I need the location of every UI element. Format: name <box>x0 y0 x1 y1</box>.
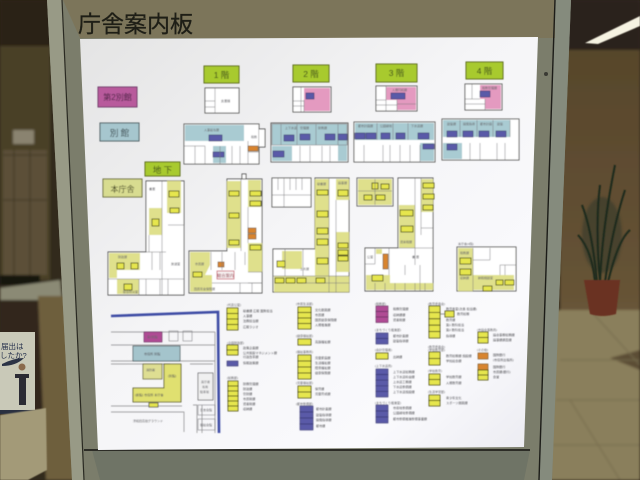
floor plan: 別館 4階: 建築課 <box>447 121 456 126</box>
floor plan: 本庁舎 3階: 公室 <box>367 254 373 259</box>
legend: column 3: 出納課 <box>393 354 402 359</box>
legend: column 2: 都市計画課 <box>316 406 331 411</box>
legend: column 4: 人権教育課 <box>446 380 461 385</box>
legend: column 3 <box>375 301 427 423</box>
floor plan: 別館 3階: 都市計画課 <box>358 123 373 128</box>
map: 駐車場棟: 専用 <box>202 384 208 389</box>
legend: column 3: (税務部) <box>375 301 386 306</box>
legend: column 4: (生涯学習部) <box>428 389 445 394</box>
legend: column 3: 資産税課 <box>393 317 405 322</box>
legend: column 5: 市民課(銀行) <box>493 369 511 374</box>
directory content <box>98 62 519 433</box>
legend: column 2: (児童福祉部) <box>296 380 313 385</box>
legend: column 2: (都市整備部) <box>296 401 313 406</box>
legend: column 2: 高齢福祉課 <box>315 339 330 344</box>
legend: column 3: 上下水道施設課 <box>393 389 415 394</box>
floor plan: 第2別館 4階: 税務管理課 <box>482 85 497 90</box>
potted plant <box>578 165 630 316</box>
legend: column 3: 建築指導課 <box>393 338 408 343</box>
legend: column 2: 建築指導課 <box>316 412 331 417</box>
legend: column 2 <box>296 301 337 430</box>
floor plan: 別館 4階: 開発指導 <box>463 121 475 126</box>
floor plan: 本庁舎 1階: 総合案内 <box>217 272 234 279</box>
map: 別館: 市役所 別館 <box>144 351 160 356</box>
legend: column 4: 教育総務 <box>457 311 469 316</box>
floor plan: 本庁舎 3階 <box>365 178 434 291</box>
floor plan: 別館 3階: 下水道課 <box>411 123 423 128</box>
floor plan: 本庁舎 地下: 財政課 <box>118 254 127 259</box>
legend: column 4: (学校教育) <box>428 368 442 373</box>
panel: lit directory board <box>80 37 538 450</box>
map: neighbouring buildings: 福祉会館 <box>200 422 212 427</box>
floor label: 3階: 3 階 <box>389 68 405 78</box>
legend: column 2: 障害福祉課 <box>315 365 330 370</box>
legend: column 4: 学校教育課 <box>446 374 461 379</box>
legend: column 1: 公共施設マネジメント課 <box>243 350 277 355</box>
tablecloth <box>0 408 47 480</box>
legend: column 5: (市議会事務局) <box>477 327 497 332</box>
map: neighbouring buildings: 日吉会館 <box>200 407 212 412</box>
floor plan: 本庁舎 地下: 書庫 <box>149 186 155 191</box>
legend: column 2: 国民健康保険課 <box>315 317 337 322</box>
floor plan: 本庁舎 1階: 市民課 <box>195 261 204 266</box>
floor plan: 別館 1階: 税務 <box>251 134 257 139</box>
legend: column 1: 収納課 <box>243 406 252 411</box>
floor plan: 別館 2階 <box>271 123 348 162</box>
ceiling light <box>585 16 640 44</box>
entrance marker <box>242 174 246 179</box>
legend: column 3: 収納課課 <box>393 312 405 317</box>
legend: column 2: (健康福祉部) <box>296 333 313 338</box>
building label: 別館 <box>100 123 139 141</box>
legend: column 5: 食堂 <box>493 374 499 379</box>
legend: column 1 <box>227 302 277 411</box>
legend: column 1: 管財課 <box>243 391 252 396</box>
floor plan: 別館 1階: 人事給与課 <box>204 127 219 132</box>
legend: column 2: 開発指導課 <box>316 417 331 422</box>
legend: column 4: 指導課 <box>446 333 455 338</box>
poster on cabinet: したか? <box>0 351 27 360</box>
legend: column 4: 学校給食課 <box>446 358 461 363</box>
legend: column 4: 青少年文化 <box>446 395 461 400</box>
building label: 第2別館: 第2別館 <box>103 92 132 102</box>
legend: column 2: 保育課 <box>315 386 324 391</box>
legend: column 4 <box>428 301 477 406</box>
building label: 第2別館 <box>98 87 137 107</box>
legend: column 4: 第2 教科担当 <box>446 327 464 332</box>
floor plan: 本庁舎 4階: 納税相談室 <box>478 275 493 280</box>
legend: column 4: 教育総務課 施設課 <box>446 353 472 358</box>
floor plan: 本庁舎 3階: 資産税課 <box>400 239 412 244</box>
map: blue boundary line <box>111 312 219 433</box>
floor plan: 本庁舎 4階: 本庁舎(4階) <box>458 241 474 246</box>
legend: column 1: 財政課 <box>243 386 252 391</box>
legend: column 1: 資産税課 <box>243 401 255 406</box>
floor plan: 別館 2階: 財務課 <box>318 125 327 130</box>
legend: column 1: 法務担当課 <box>243 318 258 323</box>
legend: column 2: 都市課 <box>316 423 325 428</box>
legend: column 3: (まちづくり推進部) <box>375 327 401 332</box>
legend: column 3: 下水道整備課 <box>393 384 412 389</box>
map: 消防署: 消防署 <box>146 367 155 372</box>
floor plan: 第2別館 3階 <box>376 86 417 111</box>
legend: column 3: (会計管理者) <box>375 347 392 352</box>
building label: 別館: 別 館 <box>110 128 130 138</box>
legend: column 2: 市民課 <box>315 312 324 317</box>
floor plan: 別館 4階: 都市計画 <box>480 121 492 126</box>
legend: column 1: 人事課 <box>243 313 252 318</box>
floor plan: 本庁舎 4階 <box>457 241 516 291</box>
floor plan: 第2別館 3階: 人権同和課 <box>392 87 407 92</box>
building label: 本庁舎: 本庁舎 <box>110 184 134 194</box>
floor label: 4階 <box>466 62 503 79</box>
floor plan: 別館 4階: 建築 <box>497 121 503 126</box>
floor plan: 本庁舎 3階 上部 <box>357 178 393 206</box>
map: 本庁舎: (別館) <box>168 373 176 378</box>
legend: column 1: 市民税課 <box>243 396 255 401</box>
building label: 本庁舎 <box>103 179 142 197</box>
floor plan: 第2別館 2階 <box>293 87 331 112</box>
floor label: 3階 <box>376 64 417 82</box>
floor label: 1階 <box>204 66 239 83</box>
legend: column 4: 第1 教科担当 <box>446 322 464 327</box>
legend: column 4: (教育委員会) <box>428 344 445 349</box>
legend: column 1: 政策企画課 <box>243 345 258 350</box>
map: 駐車場棟 <box>198 373 213 400</box>
legend: column 5: 国際銀行 <box>493 352 505 357</box>
floor label: 2階 <box>293 65 329 82</box>
floor plan: 本庁舎 2階 <box>273 178 349 292</box>
legend: column 1: 財務管理課 <box>243 381 258 386</box>
location map <box>111 312 219 433</box>
legend: column 3: 上水道工務課 <box>393 379 412 384</box>
floor plan: 第2別館 1階: 倉庫棟 <box>221 98 231 103</box>
legend: column 3: 公園緑地整備課 <box>393 410 415 415</box>
legend: column 2: (福祉事務所) <box>296 349 313 354</box>
floor plan: 別館 1階 <box>184 124 265 164</box>
legend: column 4: スポーツ振興課 <box>446 400 468 405</box>
legend: column 5: 国際銀行 <box>493 364 505 369</box>
legend: column 3: (まちづくり推進室) <box>375 400 401 405</box>
legend: column 2: 文化振興課 <box>315 307 330 312</box>
legend: column 1: 広報ラジオ <box>243 324 258 329</box>
floor plan: 別館 3階 <box>354 122 435 162</box>
legend: column 1: (総務部) <box>227 375 238 380</box>
legend: column 1: (代表公室) <box>227 302 241 307</box>
floor plan: 第2別館 1階 <box>205 88 239 113</box>
map: 駐車場棟: 駐車場 <box>200 389 209 394</box>
map: 本庁舎: (新館) 市役所 本庁舎 <box>135 392 164 397</box>
floor plan: 第2別館 4階 <box>465 84 502 110</box>
poster on cabinet: 届出は <box>1 341 24 351</box>
map: neighbouring buildings: 津和田高校グラウンド <box>133 418 163 423</box>
legend: column 5: (市役所出張所) <box>493 357 514 362</box>
floor plan: 本庁舎 4階: 税務課 <box>460 250 469 255</box>
floor plan: 本庁舎 地下 <box>108 181 184 295</box>
legend: column 3: 上下水道料金課 <box>393 374 415 379</box>
floor label: 1階: 1 階 <box>214 70 230 80</box>
floor plan: 本庁舎 1階 <box>189 179 262 293</box>
floor label: 地下 <box>145 162 180 176</box>
floor plan: 本庁舎 4階: 収納課 <box>460 275 469 280</box>
floor plan: 別館 4階 <box>442 119 519 160</box>
legend: column 3: 都市計画課 <box>393 333 408 338</box>
floor label: 2階: 2 階 <box>303 69 319 79</box>
legend: column 3: 税務管理課 <box>393 306 408 311</box>
poster on cabinet <box>0 332 40 414</box>
legend: column 1: (企画財政部) <box>227 340 244 345</box>
legend: column 5: 議会事務総務課 <box>493 332 515 337</box>
background: lobby right side with wall and floor <box>550 0 640 480</box>
legend: column 2: 人権推進課 <box>315 322 330 327</box>
legend: column 4: (学校教育部) <box>428 347 445 352</box>
floor plan: 本庁舎 2階: 議事課 <box>338 180 347 185</box>
floor plan: 別館 2階: 上下水道 <box>285 125 297 130</box>
legend: column 3: (上下水道局) <box>375 363 392 368</box>
legend: column 5 <box>477 327 515 380</box>
legend: column 3: 都市整備推進整備事業課 <box>393 416 427 421</box>
legend: column 1: 秘書課 広報 国際担当 <box>243 308 273 313</box>
floor plan: 本庁舎 2階 上部 <box>272 178 311 207</box>
map: neighbouring buildings <box>133 331 215 430</box>
map: 駐車場棟: 来庁者 <box>201 379 210 384</box>
legend: column 2: 児童家庭課 <box>315 355 330 360</box>
floor plan: 本庁舎 1階: 国民年金保険課 <box>194 286 215 291</box>
legend: column 1: 行政改革課 <box>243 354 258 359</box>
title: 庁舎案内板 <box>78 11 193 37</box>
legend: column 4: (教育委員会) <box>428 301 445 306</box>
legend: column 3: 市街地整備課 <box>393 405 412 410</box>
floor plan: 別館 2階: 管理課 <box>300 125 309 130</box>
legend: column 2: 生活福祉課 <box>315 360 330 365</box>
floor plan: 本庁舎 地下: 放送室 <box>171 261 180 266</box>
floor plan: 本庁舎 2階: 土木課 <box>300 266 309 271</box>
legend: column 2: (市民生活部) <box>296 301 313 306</box>
legend: column 2: 児童育成課 <box>315 391 330 396</box>
legend: column 5: (その他) <box>477 347 488 352</box>
floor plan: 別館 3階: 公園緑地 <box>380 123 392 128</box>
legend: column 1: 情報政策課 <box>243 360 258 365</box>
floor plan: 本庁舎 3階: 書 庫 <box>412 254 419 259</box>
map: 第2別館: 第2別館 <box>147 334 158 339</box>
floor plan: 本庁舎 2階: 秘書課 <box>317 181 326 186</box>
legend: column 4: 教育長室(次長 担当課) <box>446 306 477 311</box>
floor label: 地下: 地 下 <box>153 165 173 175</box>
floor label: 4階: 4 階 <box>477 66 493 76</box>
legend: column 5: 議事課調査課 <box>493 337 512 342</box>
legend: column 2: 健康保険課 <box>315 370 330 375</box>
legend: column 4: 教育課 <box>446 317 455 322</box>
map: 本庁舎 <box>133 364 181 402</box>
legend: column 3: 上下水道総務課 <box>393 369 415 374</box>
floor plan: 本庁舎 地下: 総合防災室 <box>123 289 138 294</box>
